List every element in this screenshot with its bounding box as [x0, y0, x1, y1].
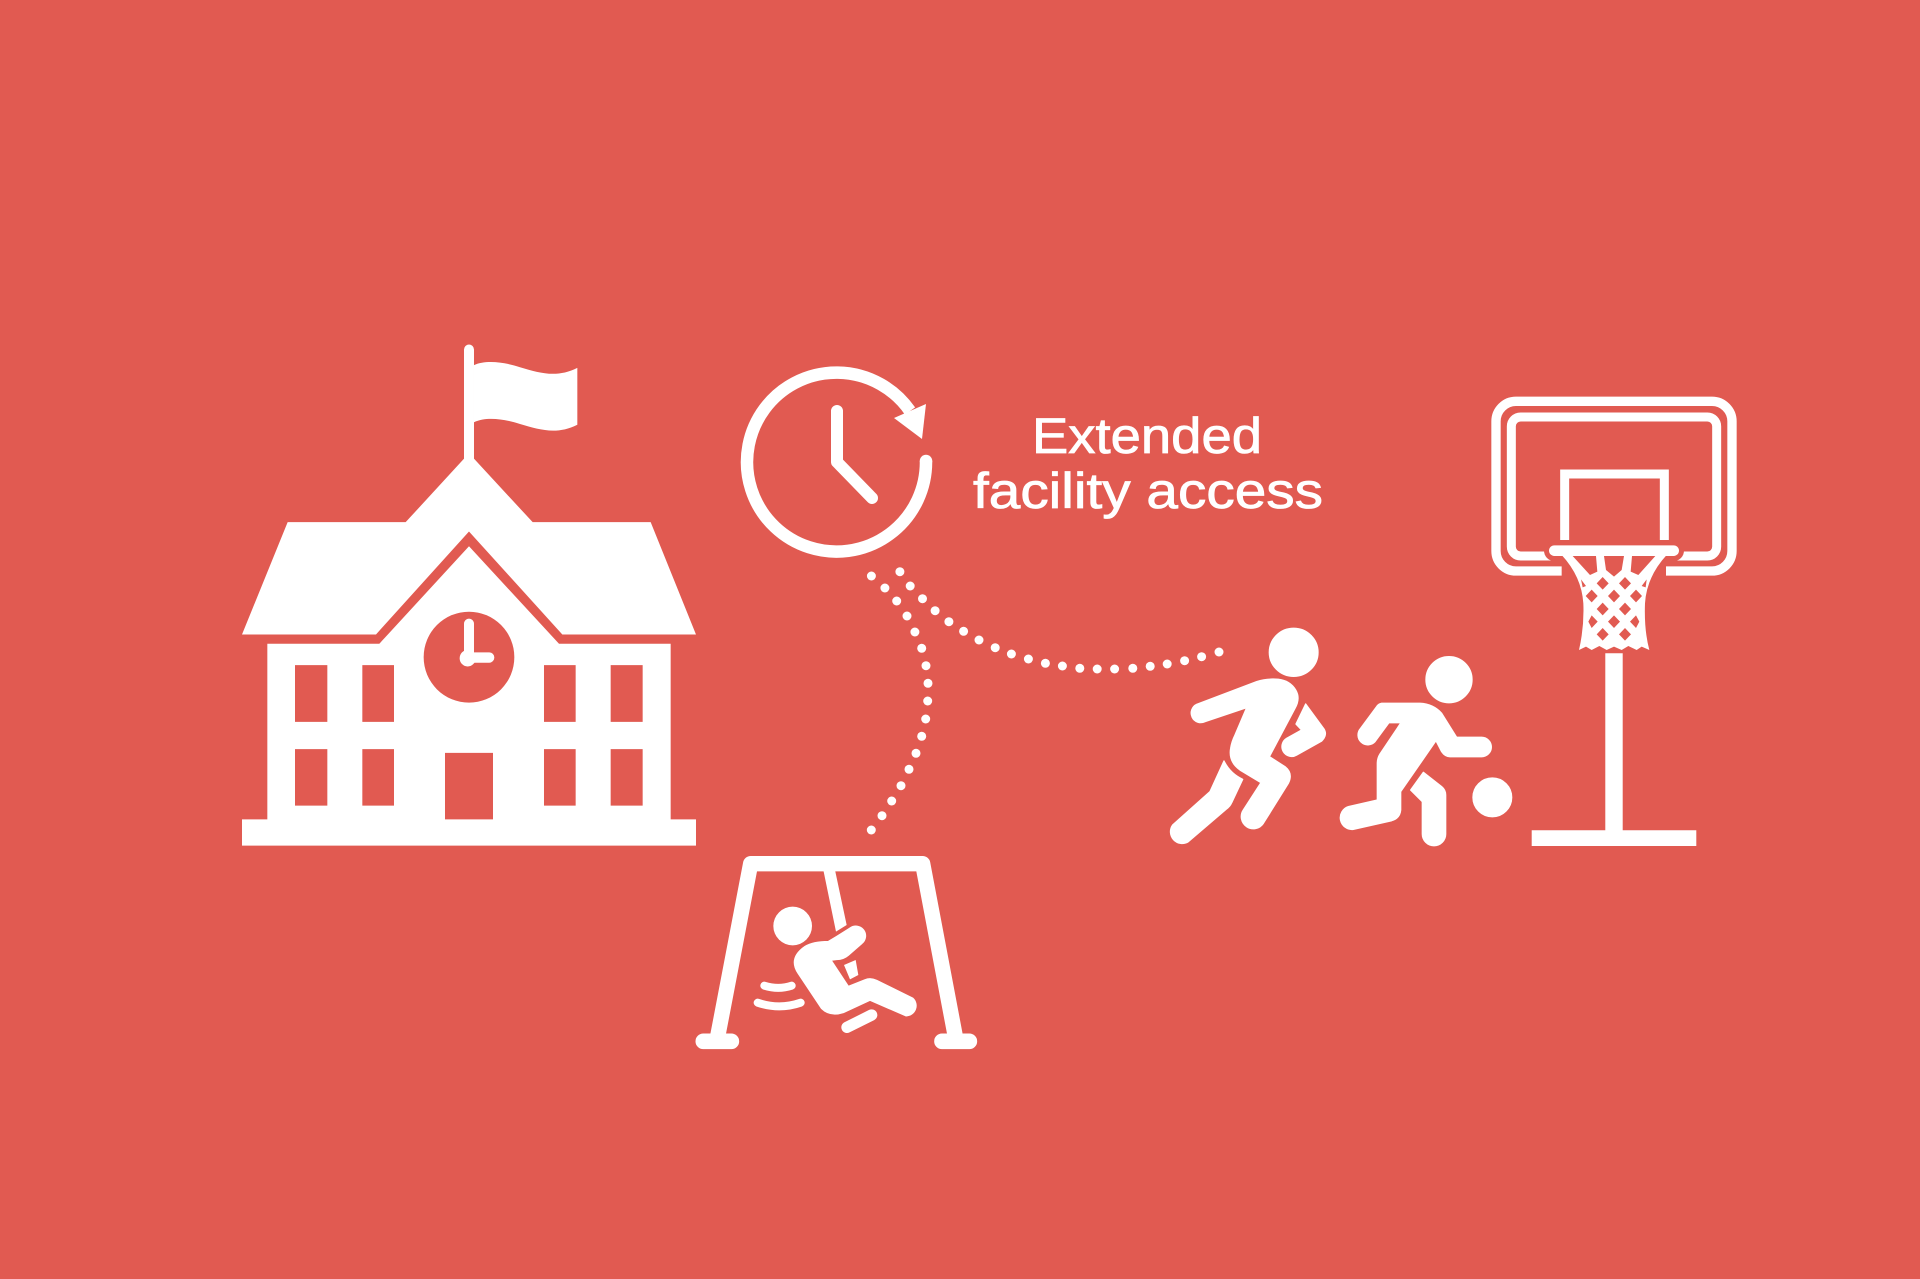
target square: [1565, 474, 1664, 540]
head: [1426, 657, 1472, 703]
circular arrow ring: [747, 373, 926, 552]
flag pole: [464, 344, 474, 463]
icon: running player: [1171, 628, 1325, 843]
body and limbs: [1340, 703, 1491, 829]
icon: school building with flag: [242, 344, 696, 846]
hoop pole and base: [1532, 653, 1696, 846]
dotted path: clock to swing set: [867, 572, 932, 834]
backboard outer frame: [1496, 401, 1732, 571]
motion lines: [758, 986, 801, 1006]
backboard and net: [1496, 401, 1732, 650]
swing seat: [847, 1015, 872, 1027]
clock hands: [837, 411, 872, 498]
swing frame: [717, 864, 956, 1040]
head: [1269, 628, 1318, 676]
backboard inner frame: [1511, 417, 1717, 556]
swing rope: [823, 870, 858, 979]
back leg: [1411, 772, 1446, 846]
ball: [1473, 778, 1512, 817]
body and front limbs: [1191, 679, 1298, 829]
building body: [242, 546, 696, 846]
back arm: [1282, 704, 1325, 756]
ring end cap: [920, 455, 932, 467]
rim halo: [1554, 520, 1674, 582]
arrowhead: [894, 404, 926, 439]
label: Extended facility access: facility access: [973, 463, 1323, 519]
icon: clock with circular arrow: [747, 373, 932, 552]
building clock: [424, 612, 514, 703]
back leg: [1171, 761, 1243, 843]
net openings: [1573, 556, 1655, 641]
child head: [773, 907, 812, 945]
net: [1562, 555, 1667, 650]
roof: [242, 453, 696, 634]
flag: [474, 362, 577, 431]
rim: [1554, 535, 1674, 567]
child body: [795, 926, 916, 1016]
swing feet: [703, 1018, 969, 1065]
icon: basketball hoop: [1496, 401, 1732, 846]
label: Extended facility access: Extended: [1032, 408, 1262, 464]
icon: dribbling player with ball: [1340, 657, 1512, 846]
label: Extended facility access: [973, 408, 1323, 519]
dotted path: clock to basketball players: [895, 567, 1224, 674]
icon: child on swing set: [703, 864, 969, 1041]
